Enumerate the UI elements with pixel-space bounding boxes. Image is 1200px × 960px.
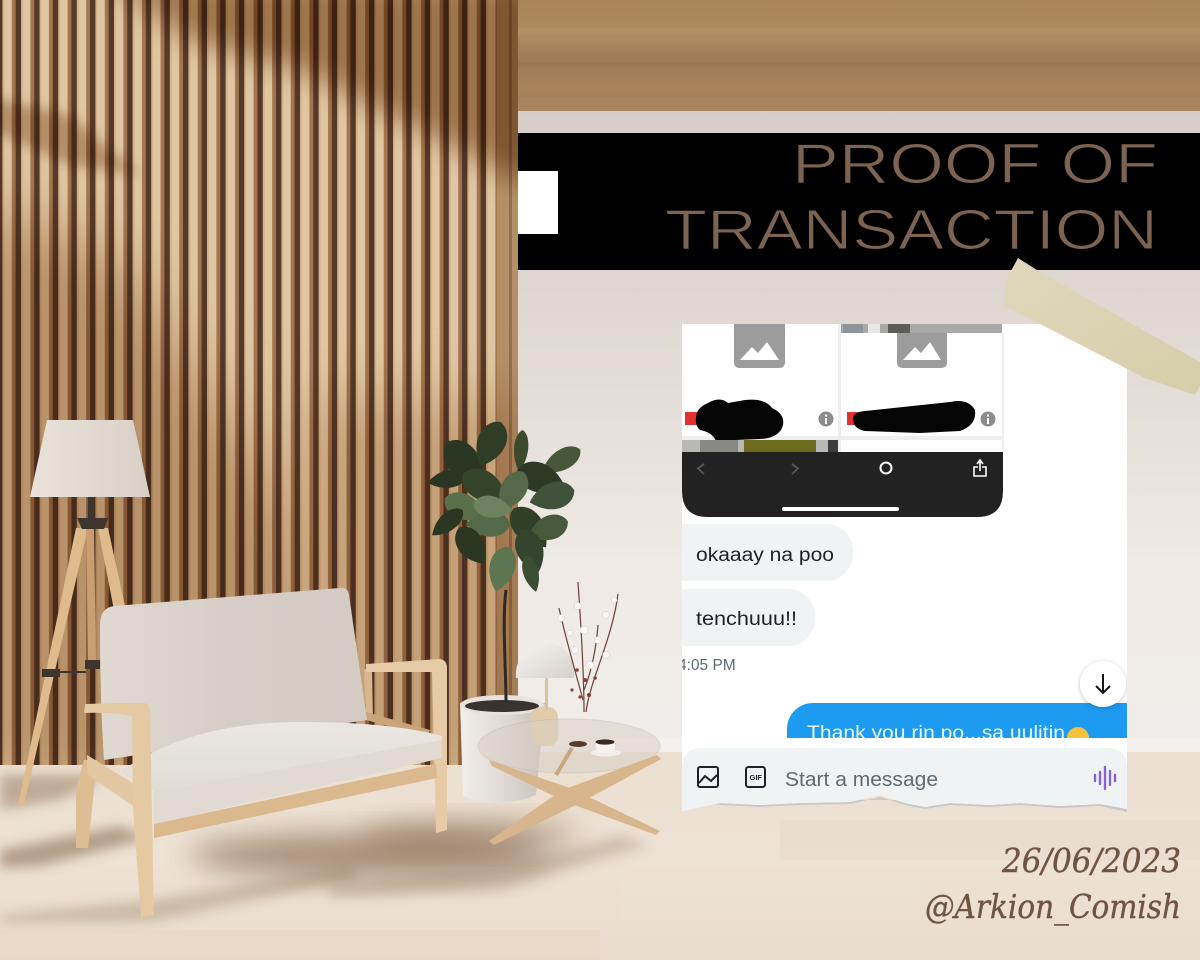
info icons [818, 412, 834, 426]
white notch [518, 171, 558, 234]
slatted wood wall [0, 0, 540, 790]
table lamp [516, 643, 574, 746]
redaction blobs [696, 400, 783, 443]
seat cushion [120, 722, 442, 824]
floor [0, 752, 1200, 960]
message bar [682, 748, 1127, 815]
table legs [489, 755, 661, 845]
plant [426, 416, 585, 803]
incoming bubbles [682, 524, 853, 646]
glass top [478, 719, 660, 773]
title [665, 132, 1158, 262]
title band [518, 132, 1200, 270]
glass side table [478, 719, 661, 845]
placeholder icons [734, 324, 785, 368]
torn edge shadow [682, 797, 1127, 812]
plant leaves [426, 416, 585, 595]
scroll down button [1080, 661, 1126, 707]
browser toolbar [682, 452, 1003, 517]
back cushion [100, 588, 367, 760]
right arm rear post [364, 669, 373, 720]
plant stem [504, 590, 506, 702]
armchair [76, 588, 447, 917]
icon: gif [746, 767, 765, 787]
wooden ceiling [518, 0, 1200, 111]
lamp brackets [42, 497, 108, 677]
outgoing bubble: Thank you rin po...sa uulitin [807, 723, 1065, 744]
red badges [685, 412, 698, 425]
date: 26/06/2023 [1001, 841, 1181, 880]
rear left leg [76, 760, 97, 848]
lamp shade [30, 420, 150, 497]
timestamp: 4:05 PM [678, 657, 736, 674]
incoming bubbles: tenchuuu!! [696, 609, 797, 630]
screenshot paper [682, 324, 1127, 812]
flower vase [558, 582, 618, 745]
coffee cup [591, 750, 621, 756]
icon: gif: GIF [750, 773, 762, 782]
skirting line [600, 738, 1200, 752]
title: PROOF OF [792, 132, 1158, 196]
front rail [154, 764, 437, 838]
message placeholder: Start a message [785, 768, 938, 791]
masking tape [1003, 258, 1200, 395]
background wall [518, 110, 1200, 760]
plant pot [460, 703, 545, 803]
lamp tripod legs [18, 528, 125, 805]
incoming bubbles: okaaay na poo [696, 545, 834, 566]
outgoing bubble [787, 703, 1127, 738]
icon: voice [1095, 767, 1115, 789]
left arm and front post [84, 703, 154, 917]
search result cells [682, 324, 1004, 452]
icon: image [698, 767, 718, 787]
floor shadows [0, 775, 650, 923]
floor lamp [18, 420, 150, 805]
rear seat rail [366, 712, 430, 737]
right arm and post [366, 659, 447, 833]
side rail [87, 755, 136, 808]
title: TRANSACTION [665, 198, 1158, 262]
second row thumbnails [682, 440, 838, 452]
